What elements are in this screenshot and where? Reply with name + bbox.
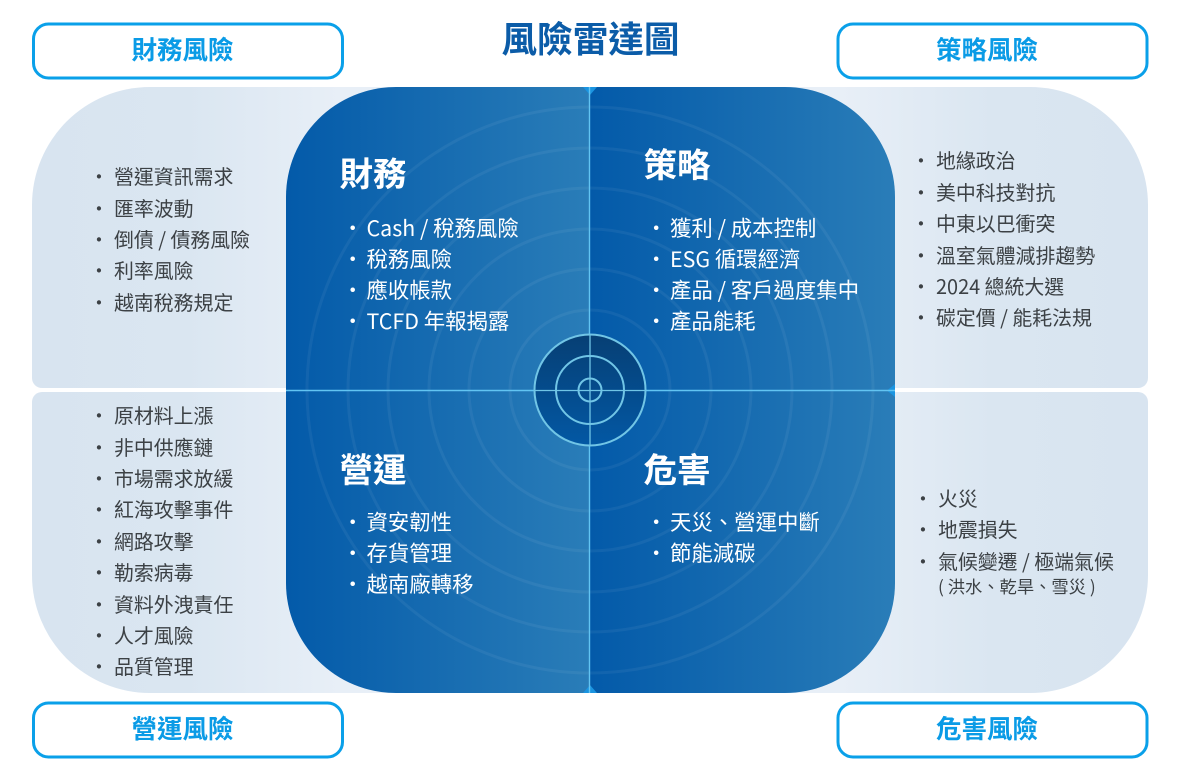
quadrant: hazard: 天災、營運中斷 (670, 506, 820, 537)
quadrant: finance: ・ (342, 212, 363, 243)
quadrant: operations: 營運 (340, 443, 406, 492)
title: 風險雷達圖 (502, 12, 679, 63)
quadrant: operations: ・ (342, 568, 363, 599)
list: financial risks: 越南稅務規定 (114, 287, 233, 316)
quadrant: hazard: ・ (646, 506, 667, 537)
list: operational risks: ・ (89, 557, 109, 586)
quadrant: finance: 應收帳款 (366, 274, 452, 305)
quadrant: operations: ・ (342, 537, 363, 568)
quadrant: finance (340, 147, 519, 336)
list: strategic risks: 美中科技對抗 (936, 177, 1055, 206)
quadrant: operations: ・ (342, 506, 363, 537)
quadrant: hazard: ・ (646, 537, 667, 568)
list: strategic risks: ・ (911, 240, 931, 269)
list: operational risks: ・ (89, 432, 109, 461)
list: hazard risks: 地震損失 (938, 514, 1018, 543)
panel: financial risk background (32, 87, 400, 388)
list: operational risks: 網路攻擊 (114, 526, 194, 555)
label: financial risk: 財務風險 (131, 30, 234, 67)
list: operational risks: 原材料上漲 (114, 400, 214, 429)
quadrant: finance: Cash / 稅務風險 (366, 212, 519, 243)
quadrant: strategy: 策略 (644, 138, 711, 187)
list: financial risks: 營運資訊需求 (114, 161, 233, 190)
list: financial risks: ・ (89, 161, 109, 190)
panel: strategic risk background (780, 87, 1148, 388)
list: financial risks: 利率風險 (114, 255, 194, 284)
quadrant: finance: TCFD 年報揭露 (366, 305, 509, 336)
radar core (534, 334, 646, 446)
panel: hazard risk background (780, 392, 1148, 693)
quadrant: operations (340, 443, 473, 599)
list: operational risks: 市場需求放緩 (114, 463, 233, 492)
list: operational risks: ・ (89, 494, 109, 523)
list: hazard risks: ・ (913, 514, 933, 543)
list: strategic risks: 地緣政治 (936, 145, 1016, 174)
list: strategic risks (911, 145, 1095, 331)
quadrant: finance: 財務 (340, 147, 406, 196)
list: operational risks (89, 400, 233, 680)
label: operational risk (34, 703, 342, 757)
list: strategic risks: ・ (911, 177, 931, 206)
list: financial risks: ・ (89, 255, 109, 284)
label: financial risk (34, 24, 342, 78)
list: operational risks: ・ (89, 620, 109, 649)
list: hazard risks: 火災 (938, 483, 978, 512)
quadrant: strategy: ・ (646, 243, 667, 274)
list: strategic risks: 碳定價 / 能耗法規 (936, 302, 1092, 331)
quadrant: strategy (644, 138, 859, 336)
quadrant: finance: 稅務風險 (366, 243, 452, 274)
list: operational risks: ・ (89, 463, 109, 492)
list: hazard risks: 氣候變遷 / 極端氣候 (938, 546, 1114, 575)
label: strategic risk: 策略風險 (936, 30, 1038, 67)
list: operational risks: 紅海攻擊事件 (114, 494, 233, 523)
quadrant: strategy: ・ (646, 274, 667, 305)
quadrant: hazard (644, 443, 820, 568)
list: operational risks: ・ (89, 651, 109, 680)
radar axes (286, 87, 895, 693)
label: hazard risk: 危害風險 (936, 709, 1038, 746)
quadrant: strategy: 產品 / 客戶過度集中 (670, 274, 859, 305)
list: operational risks: 人才風險 (114, 620, 194, 649)
list: strategic risks: ・ (911, 271, 931, 300)
quadrant: strategy: ・ (646, 212, 667, 243)
list: hazard risks: ・ (913, 483, 933, 512)
quadrant: strategy: 產品能耗 (670, 305, 756, 336)
label: hazard risk (838, 703, 1147, 757)
list: financial risks: ・ (89, 287, 109, 316)
list: hazard risks (913, 483, 1114, 598)
list: financial risks: 倒債 / 債務風險 (114, 224, 250, 253)
quadrant: operations: 存貨管理 (366, 537, 452, 568)
list: strategic risks: ・ (911, 145, 931, 174)
label: strategic risk (838, 24, 1147, 78)
panel: operational risk background (32, 392, 400, 693)
list: financial risks: ・ (89, 224, 109, 253)
list: operational risks: 品質管理 (114, 651, 194, 680)
list: operational risks: 非中供應鏈 (114, 432, 214, 461)
quadrant: operations: 越南廠轉移 (366, 568, 473, 599)
quadrant: hazard: 節能減碳 (670, 537, 756, 568)
list: strategic risks: 溫室氣體減排趨勢 (936, 240, 1095, 269)
list: hazard risks: ・ (913, 546, 933, 575)
quadrant: operations: 資安韌性 (366, 506, 452, 537)
list: operational risks: 勒索病毒 (114, 557, 194, 586)
list: financial risks (89, 161, 250, 316)
list: financial risks: 匯率波動 (114, 193, 194, 222)
list: strategic risks: 中東以巴衝突 (936, 208, 1055, 237)
label: operational risk: 營運風險 (131, 709, 234, 746)
quadrant: finance: ・ (342, 274, 363, 305)
quadrant: strategy: 獲利 / 成本控制 (670, 212, 816, 243)
list: hazard risks: ( 洪水、乾旱、雪災 ) (938, 573, 1096, 598)
radar quadrants (286, 87, 895, 693)
list: strategic risks: ・ (911, 208, 931, 237)
quadrant: finance: ・ (342, 305, 363, 336)
quadrant: hazard: 危害 (644, 443, 710, 492)
list: operational risks: ・ (89, 589, 109, 618)
list: strategic risks: 2024 總統大選 (936, 271, 1064, 300)
quadrant: strategy: ESG 循環經濟 (670, 243, 800, 274)
list: operational risks: 資料外洩責任 (114, 589, 233, 618)
list: operational risks: ・ (89, 400, 109, 429)
list: financial risks: ・ (89, 193, 109, 222)
quadrant: finance: ・ (342, 243, 363, 274)
list: strategic risks: ・ (911, 302, 931, 331)
list: operational risks: ・ (89, 526, 109, 555)
quadrant: strategy: ・ (646, 305, 667, 336)
